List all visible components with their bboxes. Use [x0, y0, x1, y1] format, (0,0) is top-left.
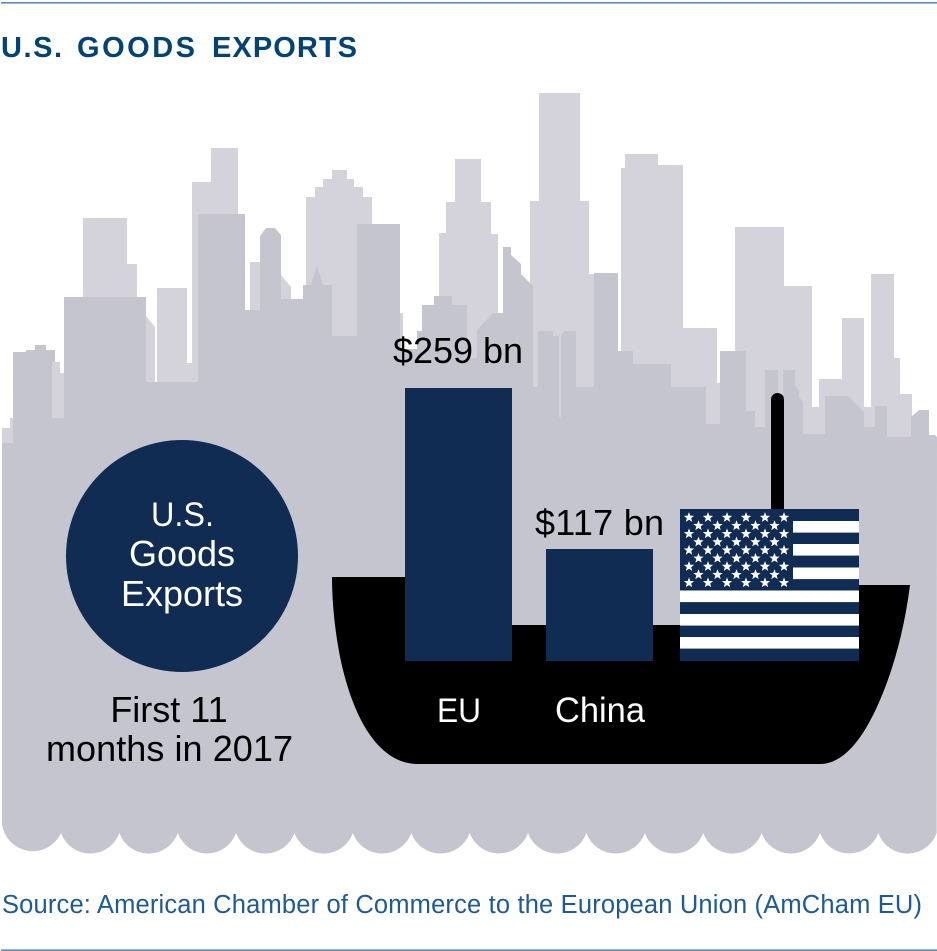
bar: China: $117 bn — [535, 502, 664, 543]
circle badge: U.S. Goods Exports: Goods — [129, 533, 235, 574]
icon: U.S. flag — [680, 509, 859, 661]
title: GOODS — [77, 32, 195, 64]
source note: Source: American Chamber of Commerce to the European Union (AmCham EU) — [2, 891, 922, 919]
title: EXPORTS — [212, 32, 357, 64]
skyline: near buildings and water with scalloped waves — [2, 214, 937, 854]
ship mast — [771, 393, 784, 510]
period note: First 11 — [110, 689, 228, 730]
bar: China: China — [555, 691, 646, 730]
title: U.S. — [1, 32, 62, 64]
bar: EU: EU — [437, 692, 481, 730]
skyline: far buildings — [2, 93, 912, 470]
period note: months in 2017 — [46, 728, 293, 769]
bar: EU — [393, 330, 523, 730]
circle badge: U.S. Goods Exports — [66, 440, 298, 672]
circle badge: U.S. Goods Exports: Exports — [121, 573, 243, 614]
circle badge: U.S. Goods Exports: U.S. — [151, 496, 214, 534]
ship hull — [332, 577, 910, 764]
title — [1, 32, 357, 64]
bar: China — [535, 502, 664, 730]
bar: EU: $259 bn — [393, 330, 523, 371]
period note — [46, 689, 293, 769]
